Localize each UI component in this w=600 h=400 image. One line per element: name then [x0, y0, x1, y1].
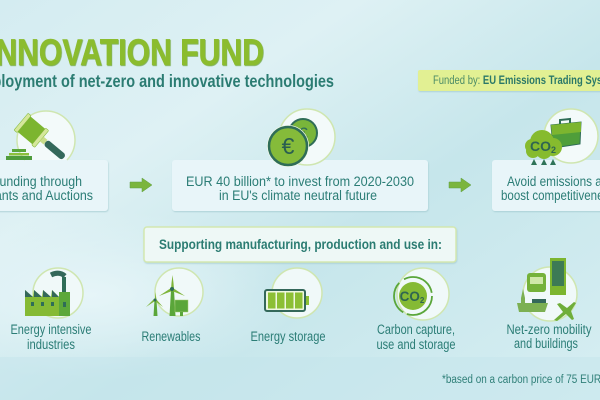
panel: avoid emissions — [492, 160, 600, 211]
label: energy intensive industries — [10, 322, 92, 352]
heading: supporting: Supporting manufacturing, production and use in: — [159, 236, 442, 252]
icon: gavel — [6, 111, 75, 166]
panel: funding — [0, 160, 108, 211]
icon: carbon capture: 2 — [420, 296, 425, 305]
heading: supporting — [144, 227, 456, 262]
label: carbon capture — [376, 322, 456, 352]
panel: EUR 40 billion: EUR 40 billion* to invest from 2020-2030 — [186, 174, 414, 189]
label: carbon capture: Carbon capture, — [377, 322, 455, 337]
icon: euro coins: € — [298, 124, 308, 143]
icon: euro coins — [267, 109, 335, 167]
label: energy storage: Energy storage — [250, 329, 326, 344]
panel: EUR 40 billion — [172, 160, 428, 211]
icon: battery — [265, 268, 322, 318]
funded by label — [418, 70, 600, 91]
label: renewables: Renewables — [142, 329, 201, 344]
icon: factory — [25, 268, 83, 318]
arrow — [449, 178, 471, 192]
label: energy intensive industries: Energy intensive — [10, 322, 92, 337]
icon: CO2 and briefcase: CO — [530, 138, 551, 154]
panel: EUR 40 billion: in EU's climate neutral future — [219, 188, 377, 203]
icon: carbon capture: CO — [400, 289, 420, 304]
icon: CO2 and briefcase — [525, 109, 598, 165]
label: net-zero mobility — [506, 322, 592, 351]
label: energy intensive industries: industries — [27, 337, 75, 352]
icon: mobility and buildings — [517, 258, 577, 321]
icon: renewables — [146, 268, 203, 316]
arrow — [130, 178, 152, 192]
icon: carbon capture — [394, 268, 449, 320]
icon: euro coins: € — [282, 133, 295, 159]
label: carbon capture: use and storage — [376, 337, 456, 352]
label: net-zero mobility: and buildings — [514, 336, 578, 351]
icon: CO2 and briefcase: 2 — [551, 145, 556, 155]
